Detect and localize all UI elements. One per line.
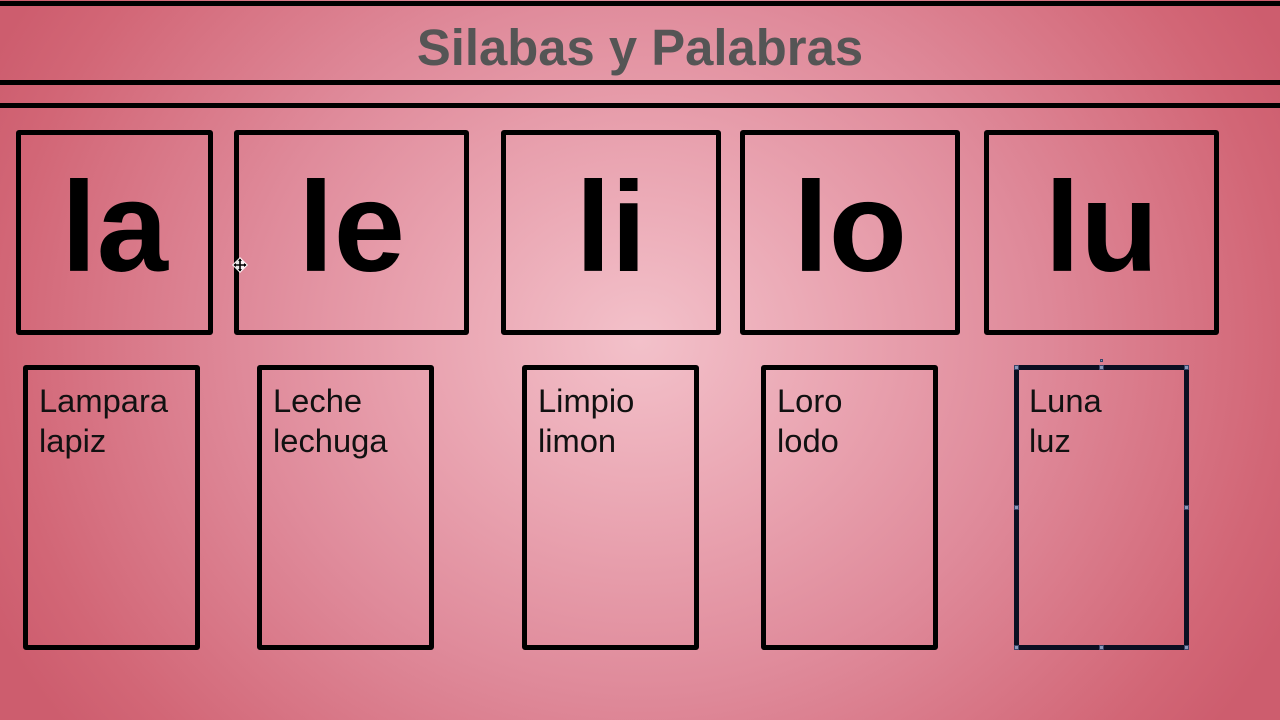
word card: le words: [257, 365, 434, 650]
syllable card: lo: lo: [793, 156, 907, 299]
syllable card: lu: [984, 130, 1219, 335]
syllable card: la: [16, 130, 213, 335]
syllable card: li: [501, 130, 721, 335]
syllable card: le: [234, 130, 469, 335]
title: Silabas y Palabras: [417, 19, 863, 76]
word card: lu words, selected: luz: [1029, 422, 1071, 459]
syllable card: lo: [740, 130, 960, 335]
syllable card: le: le: [298, 156, 405, 299]
word card: la words: [23, 365, 200, 650]
word card: le words: Leche: [273, 382, 362, 419]
word card: le words: lechuga: [273, 422, 388, 459]
word card: lu words, selected: [1014, 365, 1189, 650]
word card: li words: limon: [538, 422, 616, 459]
word card: la words: Lampara: [39, 382, 168, 419]
word card: la words: lapiz: [39, 422, 106, 459]
word card: lo words: Loro: [777, 382, 842, 419]
icon: move cursor: [232, 257, 248, 273]
word card: li words: [522, 365, 699, 650]
word card: lo words: lodo: [777, 422, 839, 459]
word card: lo words: [761, 365, 938, 650]
word card: li words: Limpio: [538, 382, 634, 419]
word card: lu words, selected: Luna: [1029, 382, 1102, 419]
syllable card: la: la: [61, 156, 168, 299]
syllable card: lu: lu: [1045, 156, 1158, 299]
syllable card: li: li: [575, 156, 647, 299]
